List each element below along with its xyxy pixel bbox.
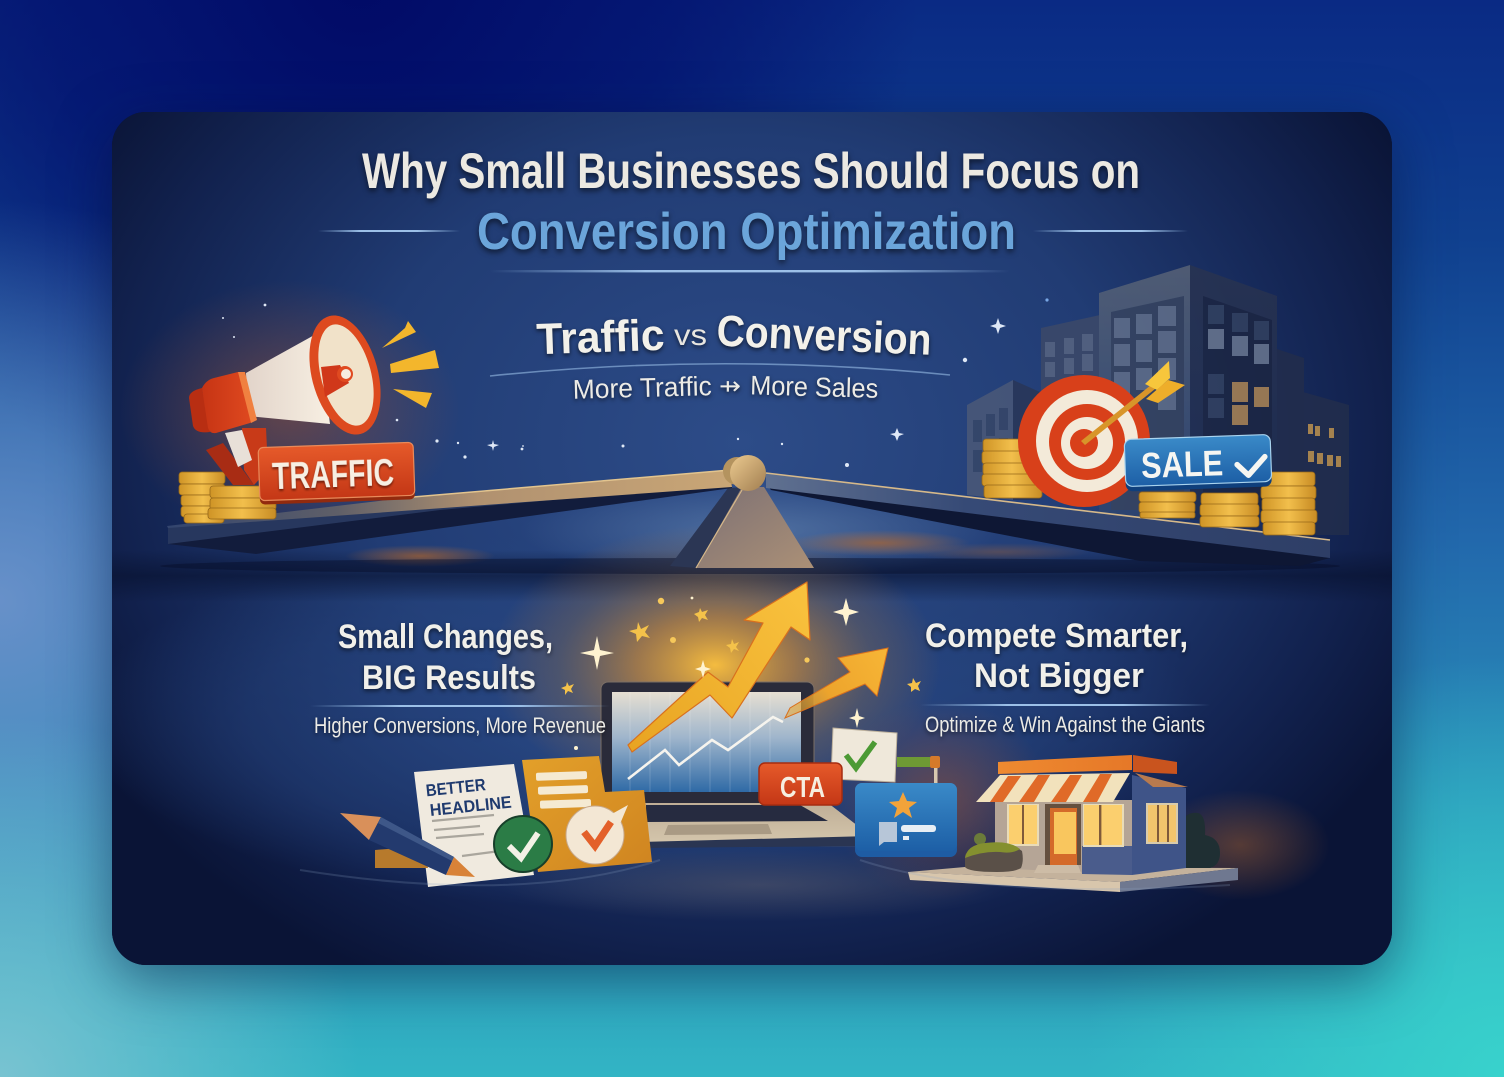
scale shadow	[160, 558, 1340, 574]
front wall	[995, 800, 1132, 875]
fulcrum	[670, 487, 814, 568]
side window	[1146, 803, 1178, 844]
line chart	[628, 717, 783, 779]
section: compete smarter text	[925, 617, 1205, 737]
icon: laptop with chart	[601, 682, 871, 848]
coins: right stacks on beam	[1139, 472, 1317, 535]
tower front face	[1099, 265, 1190, 520]
icon: folder	[522, 756, 652, 872]
roof side	[1133, 755, 1177, 774]
sound rays	[382, 321, 439, 408]
document: better headline	[414, 764, 534, 887]
icon: shop	[908, 755, 1238, 892]
left window	[1007, 804, 1039, 846]
back right block	[1277, 349, 1304, 520]
right beam	[766, 473, 1330, 566]
awning	[976, 773, 1130, 802]
heading word: vs: vs	[674, 319, 707, 352]
sparkles around arrows	[574, 597, 865, 750]
trackpad	[664, 824, 772, 835]
dark shrub	[1186, 813, 1220, 868]
side wall	[1132, 775, 1186, 875]
screen gridlines	[630, 692, 770, 792]
screen	[612, 692, 801, 792]
icon: growth arrow small	[785, 648, 888, 718]
title	[362, 143, 1140, 261]
door	[1045, 804, 1081, 865]
far right low building	[1303, 392, 1349, 535]
section: traffic vs conversion heading	[536, 307, 933, 405]
base	[622, 803, 871, 847]
icon: green check circle	[494, 816, 552, 872]
heading: Compete Smarter,	[925, 617, 1188, 655]
lid	[601, 682, 814, 807]
badge: traffic	[258, 442, 415, 505]
heading line 2: BIG Results	[362, 659, 536, 697]
stars field	[222, 298, 1049, 467]
heading line 2: Not Bigger	[974, 657, 1144, 695]
roof front	[998, 755, 1132, 774]
review lines	[879, 822, 936, 846]
subheading	[572, 370, 879, 405]
badge: sale	[1124, 434, 1272, 492]
curved rule	[490, 364, 950, 376]
subheading: More Sales	[750, 370, 879, 404]
left low building	[967, 380, 1040, 500]
mid-rise building	[1041, 315, 1100, 440]
middle window	[1083, 804, 1124, 847]
badge: traffic: TRAFFIC	[271, 452, 395, 498]
left beam	[167, 470, 732, 554]
coins: left stacks	[179, 472, 276, 523]
folder lines	[536, 771, 591, 809]
badge: sale: SALE	[1140, 442, 1224, 486]
icon: pencil	[340, 813, 475, 877]
star	[889, 792, 917, 818]
subheading: More Traffic	[572, 371, 712, 405]
steps	[1034, 865, 1081, 873]
icon: target	[1018, 361, 1185, 507]
horn cone	[246, 333, 330, 424]
icon: check card	[831, 728, 897, 782]
keyboard	[646, 805, 828, 822]
badge: CTA: CTA	[780, 772, 825, 804]
icon: megaphone	[189, 308, 439, 485]
subheading: ⇸	[719, 373, 741, 400]
title line 1: Why Small Businesses Should Focus on	[362, 143, 1140, 199]
document heading	[425, 773, 512, 820]
scale	[160, 455, 1340, 574]
planter	[965, 833, 1023, 872]
icon: growth arrow large	[628, 582, 810, 752]
section: small changes text	[314, 618, 606, 738]
rule left	[310, 705, 610, 707]
card panel	[80, 112, 1392, 965]
mouth	[297, 308, 393, 442]
rule right	[920, 704, 1210, 706]
heading word: Conversion: Conversion	[716, 307, 933, 365]
coins: right stack by target	[982, 439, 1042, 498]
arrow in target	[1081, 361, 1185, 445]
driver	[321, 365, 353, 397]
document lines	[432, 815, 500, 856]
buildings skyline	[967, 265, 1349, 535]
collar	[189, 372, 257, 433]
mouth inner	[308, 318, 384, 432]
icon: blue review card	[855, 756, 957, 857]
document heading: HEADLINE	[429, 793, 512, 820]
platform	[908, 867, 1238, 892]
icon: cream check circle	[566, 805, 628, 864]
badge: CTA	[759, 763, 842, 805]
base edge	[640, 836, 871, 848]
heading word: Traffic: Traffic	[536, 311, 665, 364]
sub caption: Higher Conversions, More Revenue	[314, 713, 606, 738]
pivot ball	[723, 455, 766, 491]
sub caption: Optimize & Win Against the Giants	[925, 712, 1205, 737]
tower side face	[1190, 265, 1277, 520]
side roof	[1135, 773, 1188, 787]
handle	[206, 428, 268, 485]
title line 2: Conversion Optimization	[477, 203, 1016, 261]
document heading: BETTER	[425, 775, 487, 800]
title rules	[318, 230, 1188, 272]
heading: Small Changes,	[338, 618, 553, 656]
bottom floor sweep	[300, 860, 1230, 889]
